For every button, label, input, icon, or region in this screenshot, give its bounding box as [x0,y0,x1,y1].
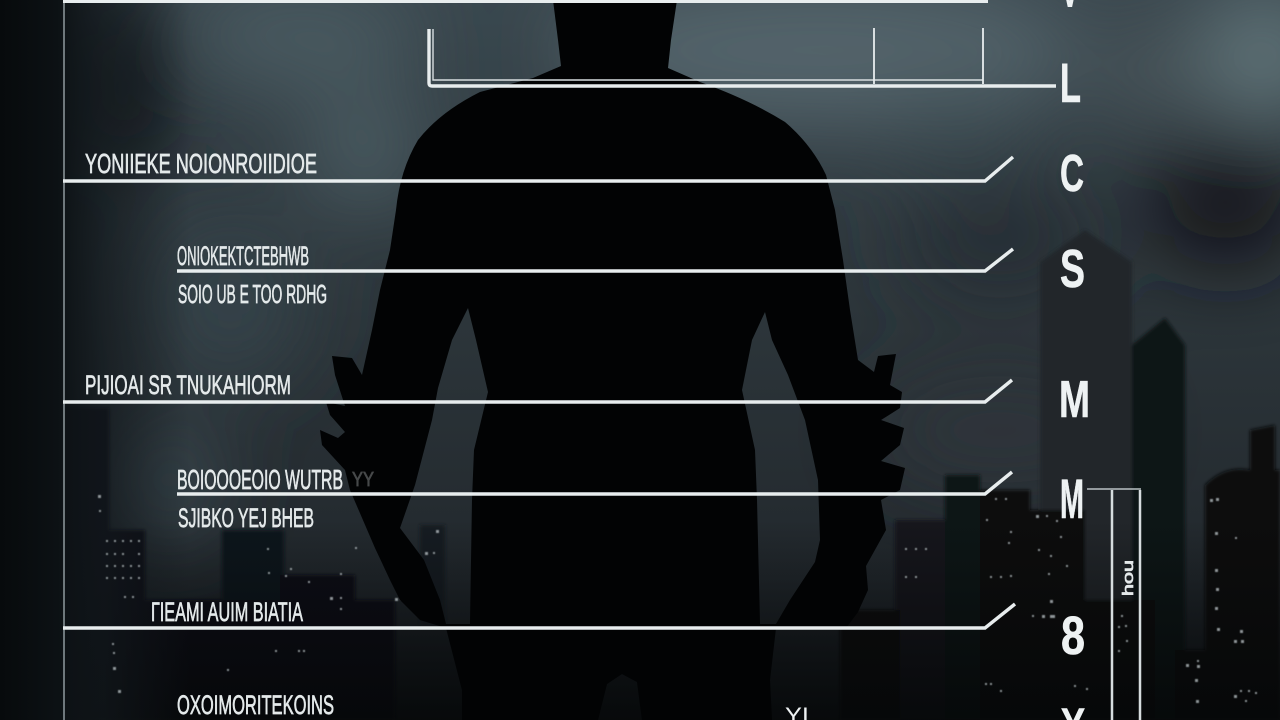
label three: PIJIOAI SR TNUKAHIORM [85,370,291,400]
label four faint text: YY [352,469,374,491]
letter S: S [1060,239,1085,299]
left annotation labels: ONIOKEKTCTEBHWB [177,241,309,271]
letter M second: M [1060,467,1084,530]
letter L: L [1060,51,1081,114]
label two sub text: SOIO UB E TOO RDHG [178,279,327,309]
right scale label: hou [1120,560,1137,596]
digit 8: 8 [1061,606,1085,666]
top line [63,0,988,3]
label six: OXOIMORITEKOINS [177,690,334,720]
label four heading: BOIOOOEOIO WUTRB [177,464,343,495]
size letters [1059,51,1090,666]
letter C: C [1060,145,1084,203]
line five [63,604,1015,628]
left buildings [65,408,445,720]
right scale bracket [1087,489,1141,720]
line four [177,472,1012,494]
label five: ГIEAMI AUIM BIATIA [151,597,303,627]
label one: YONIIEKE NOIONROIIDIOE [85,148,317,179]
line two [177,249,1013,271]
human silhouette [320,0,905,720]
city skyline [65,230,1280,720]
lit windows [98,495,1257,703]
line one [63,157,1013,181]
left annotation labels [85,148,374,720]
letter M: M [1059,371,1090,429]
right buildings [840,230,1280,720]
neck bracket [429,28,1056,86]
line three [63,380,1012,402]
label four sub text: SJIBKO YEJ BHEB [178,503,314,533]
left vertical axis [63,0,65,720]
